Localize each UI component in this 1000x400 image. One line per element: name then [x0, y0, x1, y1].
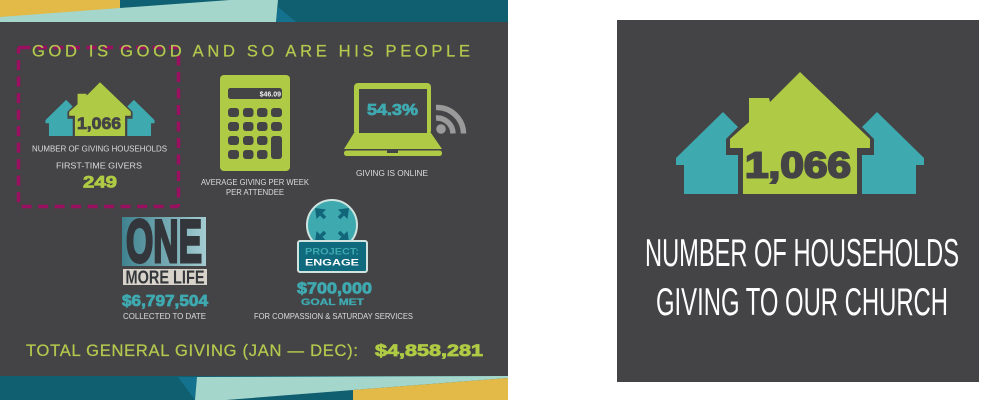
number: 249: 249 — [83, 172, 117, 192]
icon: wifi — [436, 107, 464, 134]
logo: project engage: PROJECT: — [305, 246, 359, 256]
total general giving — [26, 341, 483, 360]
icon: calculator: $46.09 — [260, 92, 281, 98]
panel: project engage — [254, 200, 413, 321]
label: first-time givers: FIRST-TIME GIVERS — [56, 162, 142, 170]
logo: one more life: ONE — [126, 208, 202, 275]
number: 6,797,504: $6,797,504 — [122, 293, 208, 310]
number: 54.3%: 54.3% — [367, 102, 418, 119]
label: number of giving households: NUMBER OF GIVING HOUSEHOLDS — [32, 144, 167, 154]
icon: large houses — [676, 72, 924, 194]
logo: one more life — [122, 208, 207, 288]
label: compassion and Saturday services: FOR COMPASSION & SATURDAY SERVICES — [254, 312, 413, 321]
label: giving is online: GIVING IS ONLINE — [356, 169, 428, 178]
heading: GOD IS GOOD AND SO ARE HIS PEOPLE — [32, 42, 470, 60]
panel: infographic background — [0, 0, 508, 400]
label: per attendee: PER ATTENDEE — [226, 188, 284, 197]
panel: online giving — [344, 83, 464, 178]
label: collected to date: COLLECTED TO DATE — [123, 312, 206, 321]
number: households small: 1,066 — [77, 114, 121, 133]
panel: number of households detail — [617, 20, 979, 382]
panel: one more life — [122, 208, 208, 321]
highlight: dashed box — [18, 48, 178, 206]
number: 700,000: $700,000 — [297, 280, 372, 298]
logo: one more life: MORE LIFE — [126, 268, 204, 288]
number: households large: 1,066 — [745, 144, 851, 186]
label: goal met: GOAL MET — [301, 297, 365, 307]
icon: laptop — [344, 83, 442, 156]
bottom decorative band — [0, 376, 508, 400]
logo: project engage: ENGAGE — [305, 258, 359, 268]
icon: small houses — [45, 82, 155, 136]
label: total general giving: TOTAL GENERAL GIVING (JAN — DEC): — [26, 342, 358, 360]
top decorative band — [0, 0, 508, 22]
number: 4,858,281: $4,858,281 — [375, 341, 483, 360]
panel: giving households — [32, 82, 167, 192]
panel: average giving — [201, 75, 310, 197]
logo: project engage — [298, 200, 367, 272]
label: average giving: AVERAGE GIVING PER WEEK — [201, 178, 310, 187]
